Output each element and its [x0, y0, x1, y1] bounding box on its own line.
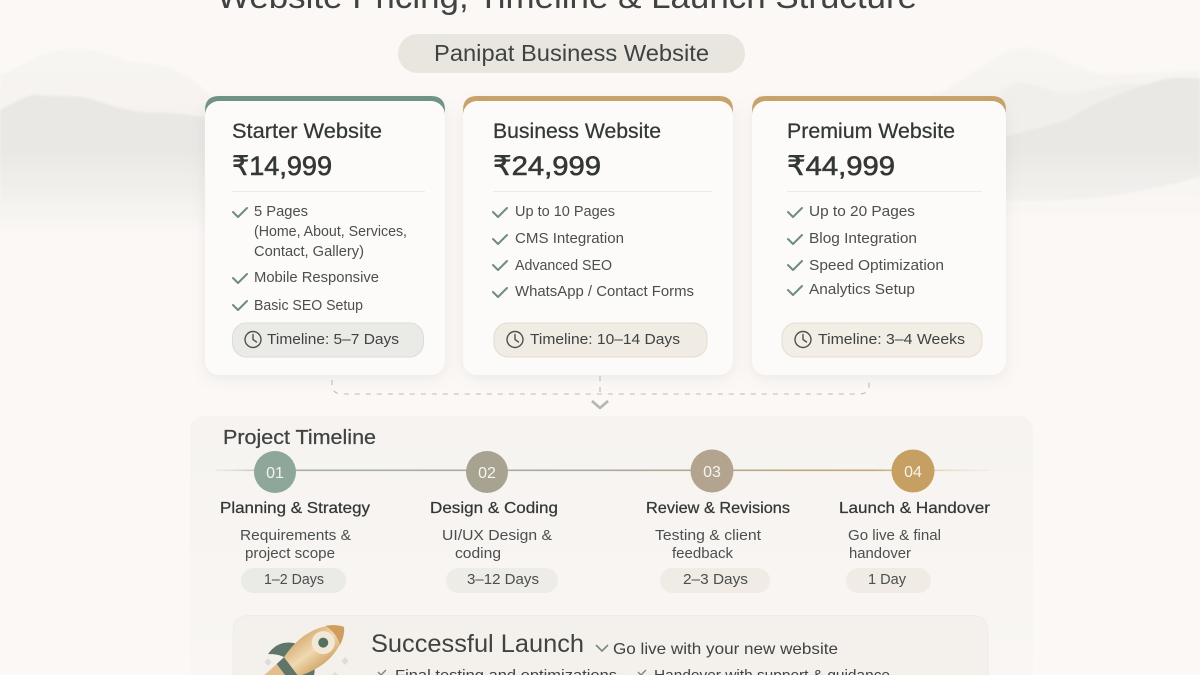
step 01: 1–2 Days [264, 572, 324, 588]
step 03 [646, 450, 790, 593]
step 01: Requirements & [240, 528, 351, 544]
step 03: Review & Revisions [646, 500, 790, 517]
step 03: 2–3 Days [683, 572, 748, 588]
step 02: UI/UX Design & [442, 528, 552, 544]
step 04: Go live & final [848, 528, 941, 544]
feature list: Contact, Gallery) [254, 244, 364, 260]
step 01: project scope [245, 546, 335, 562]
launch heading: Successful Launch [371, 630, 584, 658]
panel: starter plan [205, 96, 445, 375]
step 04: 1 Day [868, 572, 907, 588]
feature list: Basic SEO Setup [254, 298, 363, 314]
feature list: CMS Integration [515, 231, 624, 247]
launch checklist [378, 669, 890, 675]
step 03: Testing & client [655, 528, 761, 544]
connector arrows [332, 376, 869, 408]
timeline badge [494, 323, 707, 357]
feature list: Blog Integration [809, 231, 917, 247]
feature list: 5 Pages [254, 204, 308, 220]
feature list: Speed Optimization [809, 258, 944, 274]
feature list: Up to 20 Pages [809, 204, 915, 220]
launch tagline: Go live with your new website [613, 641, 838, 658]
plan name: Premium Website [787, 120, 955, 143]
feature list: (Home, About, Services, [254, 224, 407, 240]
step 02: coding [455, 546, 501, 562]
panel: project timeline [190, 416, 1033, 675]
feature list: WhatsApp / Contact Forms [515, 284, 694, 300]
misty mountains [0, 47, 1200, 245]
panel: business plan [463, 96, 733, 375]
step 02 [430, 451, 558, 593]
panel: premium plan [752, 96, 1006, 375]
plan name: Business Website [493, 120, 661, 143]
step 03: 03 [703, 464, 721, 481]
feature list: Advanced SEO [515, 258, 612, 274]
step 01: Planning & Strategy [220, 500, 370, 517]
step 01 [220, 451, 370, 593]
price: ₹44,999 [787, 151, 895, 181]
subtitle pill [398, 34, 745, 73]
panel: successful launch [232, 615, 988, 675]
feature list [788, 204, 944, 298]
feature list: Mobile Responsive [254, 270, 379, 286]
timeline heading: Project Timeline [223, 427, 376, 449]
timeline badge [232, 323, 424, 357]
feature list: Analytics Setup [809, 282, 915, 298]
step 04: Launch & Handover [839, 500, 991, 517]
step 04 [839, 450, 991, 593]
timeline badge: Timeline: 10–14 Days [530, 331, 680, 348]
timeline badge [782, 323, 982, 357]
step 04: 04 [904, 464, 922, 481]
step 02: 3–12 Days [467, 572, 539, 588]
plan name: Starter Website [232, 120, 382, 143]
step 01: 01 [266, 465, 284, 482]
step 02: Design & Coding [430, 500, 558, 517]
feature list: Up to 10 Pages [515, 204, 615, 220]
step 02: 02 [478, 465, 496, 482]
subtitle pill: Panipat Business Website [434, 40, 709, 66]
sparkles [264, 657, 348, 675]
icon: rocket [264, 625, 344, 675]
price: ₹24,999 [493, 151, 601, 181]
timeline badge: Timeline: 3–4 Weeks [818, 331, 965, 348]
feature list [493, 204, 694, 300]
price: ₹14,999 [232, 151, 332, 181]
step 03: feedback [672, 546, 734, 562]
timeline badge: Timeline: 5–7 Days [267, 331, 399, 348]
feature list [233, 204, 407, 314]
step 04: handover [849, 546, 911, 562]
